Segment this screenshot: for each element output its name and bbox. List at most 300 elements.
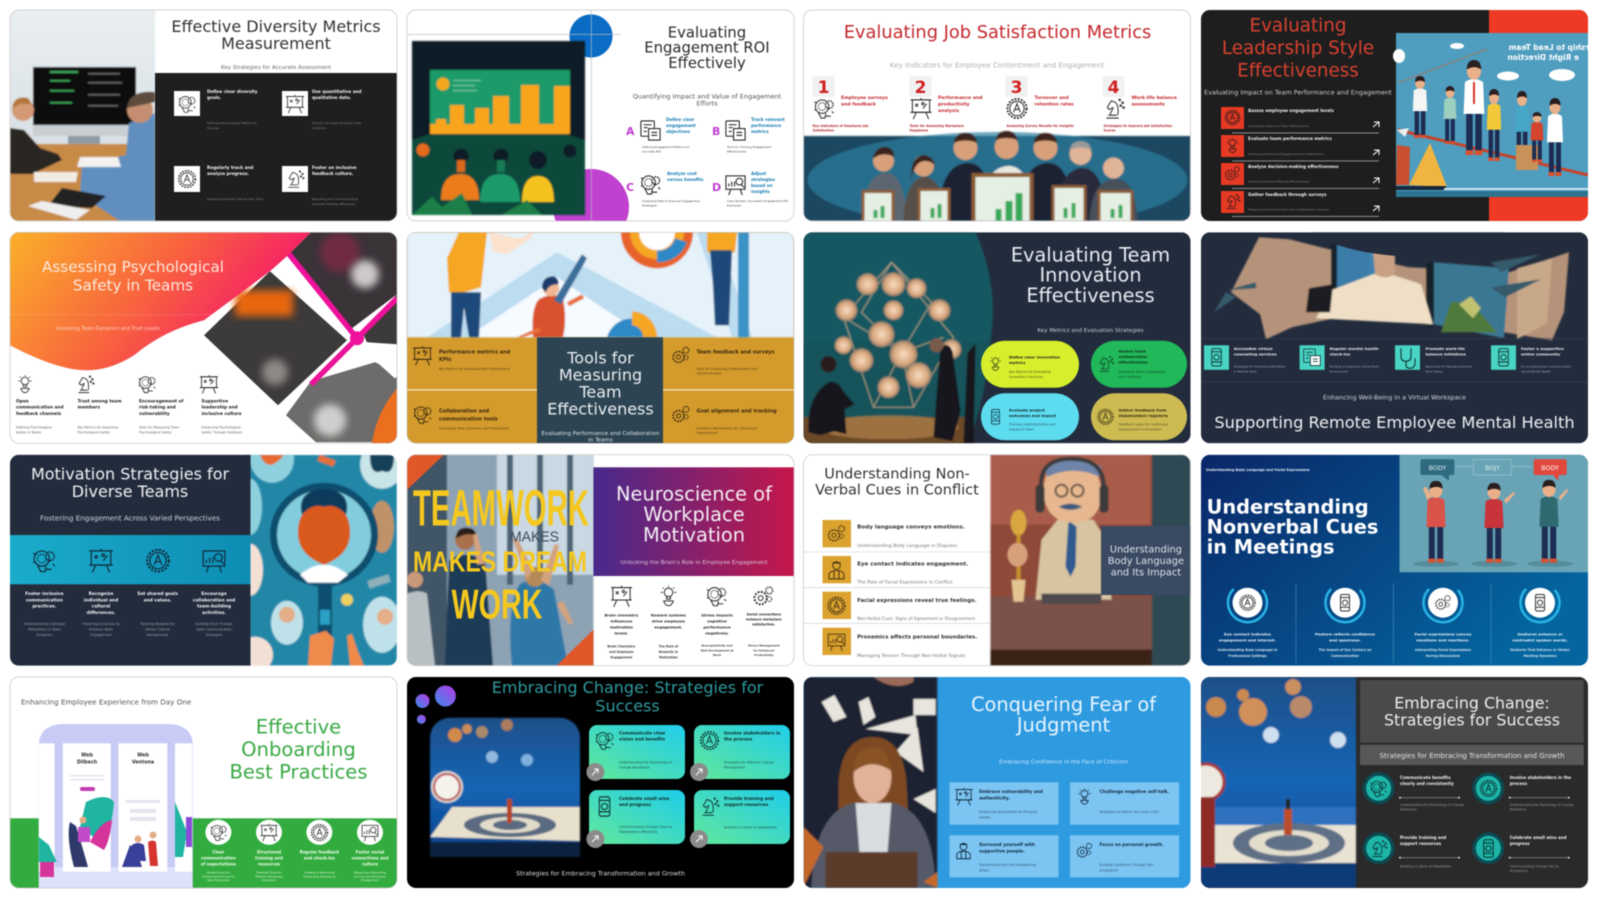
- item: collaboration: [414, 407, 509, 430]
- item B: Track relevant: [751, 117, 785, 122]
- item: leadership: Enhancing Psychological: [202, 425, 241, 429]
- title: Evaluating: [1250, 16, 1346, 36]
- item: goal alignment: Feedback Mechanisms for Continuous: [696, 426, 757, 430]
- column: eye contact: engagement and interest.: [1219, 638, 1277, 643]
- card: vulnerability: Growth: [979, 815, 991, 819]
- panel: Tools for Measuring Team Effectiveness: [407, 196, 794, 443]
- title: Effectiveness: [1026, 284, 1155, 307]
- column: social connections: for Enhanced: [753, 648, 774, 652]
- card: personal growth: [1070, 835, 1179, 877]
- column: gestures: Gestures That Enhance or Hinder: [1510, 648, 1570, 652]
- item: communicate: [1363, 772, 1464, 812]
- row: decision making: Analyzing Decision-Making Effectiveness: [1248, 180, 1310, 184]
- column: social connections: Success and Employee: [354, 874, 386, 878]
- column: shared goals: Varied Cultural: [145, 628, 170, 632]
- column: shared goals: Set shared goals: [137, 591, 178, 597]
- item: open communication: communication and: [16, 405, 64, 411]
- title: Leadership Style: [1222, 38, 1374, 59]
- column: training: Essential Tools for: [256, 870, 282, 874]
- title: Onboarding: [241, 738, 356, 761]
- column: eye contact: Understanding Body Language in: [1218, 648, 1278, 652]
- column: expectations: communication: [201, 856, 236, 860]
- column: facial expressions: Facial expressions convey: [1414, 632, 1472, 637]
- panel: Evaluating Leadership Style Effectiveness: [1201, 10, 1589, 221]
- card: stakeholder feedback: Gather feedback from: [1118, 407, 1167, 412]
- card: personal growth: Focus on personal growth.: [1100, 842, 1164, 848]
- card: team collaboration: Assessing Team Collaboration: [1118, 370, 1166, 374]
- caption: Strategies for Embracing Transformation and Growth: [516, 870, 685, 878]
- column: training: Structured: [257, 850, 281, 854]
- item: open communication: feedback channels: [16, 411, 62, 417]
- card: stakeholders: the process: [724, 736, 753, 742]
- item: open communication: Open: [16, 398, 29, 404]
- item: quantitative data: [282, 89, 362, 130]
- column: inclusive communication: [24, 591, 65, 637]
- column: social connections: culture: [362, 862, 378, 866]
- card: team collaboration: and Creativity: [1118, 375, 1141, 379]
- title: Evaluating Team: [1011, 243, 1170, 266]
- subtitle: Embracing Confidence in the Face of Criticism: [999, 760, 1128, 766]
- item: work-life balance: Promote work-life: [1426, 346, 1465, 351]
- illustration: clay professor with headphones: [990, 455, 1190, 666]
- column: eye contact: [1218, 575, 1278, 658]
- column: check-ins: and check-ins: [304, 856, 336, 860]
- column: social connections: Engagement: [361, 878, 380, 882]
- subtitle: Fostering Engagement Across Varied Perspectives: [40, 514, 220, 523]
- item 3: Analyzing Survey Results for Insights: [1006, 124, 1074, 128]
- icon band: [10, 535, 250, 584]
- column: check-ins: Regular feedback: [300, 850, 340, 854]
- row: proxemics: [822, 628, 977, 659]
- row: decision making: [1221, 163, 1379, 189]
- column: brain chemistry: Engagement: [610, 656, 633, 660]
- title block: Motivation: [643, 524, 745, 547]
- title: Motivation Strategies for: [31, 465, 229, 484]
- column: stress: negatively.: [705, 630, 729, 635]
- column: cultural differences: Engagement: [90, 633, 112, 637]
- title: Innovation: [1039, 264, 1142, 287]
- card: supportive people: [950, 835, 1058, 877]
- item 4: Scores: [1104, 129, 1116, 133]
- card: team collaboration: Assess team: [1118, 348, 1146, 353]
- title: Measurement: [221, 34, 331, 53]
- item: open communication: [16, 375, 64, 435]
- column: gestures: Meeting Dynamics: [1523, 654, 1557, 658]
- illustration: audience watching a chart: [412, 41, 585, 215]
- item: check-ins: Building a Supportive Virtual Work: [1330, 364, 1380, 368]
- column: inclusive communication: Dynamics: [36, 633, 53, 637]
- item: team feedback: Communication: [696, 372, 722, 376]
- item A: Defining Engagement Metrics for: [642, 145, 691, 149]
- panel: Embracing Change: Strategies for Success (grey): [1188, 677, 1588, 888]
- item: check-ins: [1300, 345, 1380, 373]
- title block: Effectiveness: [547, 399, 654, 418]
- illustration: team analysing a target: [407, 196, 794, 337]
- column: team building: Encourage: [201, 591, 227, 597]
- row: eye contact: [822, 556, 968, 586]
- item: trust: Psychological Safety: [78, 431, 110, 435]
- item B: [712, 117, 785, 154]
- item: performance metrics: KPIs: [439, 357, 451, 363]
- card: stakeholder feedback: Feedback Loops for Continuous: [1118, 422, 1169, 426]
- subtitle: Enhancing Employee Experience from Day One: [21, 698, 192, 706]
- item C: C: [626, 181, 634, 194]
- item: risk taking: risk-taking and: [139, 405, 176, 411]
- column: training: [255, 820, 283, 882]
- item: communicate: Understanding the Psychology of Change: [1400, 803, 1464, 807]
- card: supportive people: Action: [979, 868, 989, 872]
- title: Success: [595, 696, 660, 715]
- item 4: assessments: [1132, 102, 1165, 108]
- title block: [537, 337, 663, 443]
- row: body language: [822, 520, 965, 549]
- item C: Analyzing Data to Improve Engagement: [642, 199, 701, 203]
- item: trust: members: [78, 405, 100, 411]
- title: Nonverbal Cues: [1207, 516, 1378, 539]
- card: stakeholder feedback: Improvement in Innovation: [1118, 428, 1162, 432]
- card: vulnerability: authenticity.: [979, 795, 1010, 801]
- column: social connections: Measuring Onboarding: [354, 870, 386, 874]
- item D: [712, 171, 788, 208]
- column: posture: and openness.: [1329, 638, 1361, 643]
- item: training: [1363, 832, 1460, 868]
- item: define goals: Success: [207, 126, 220, 130]
- column: shared goals: and values.: [144, 597, 172, 603]
- item 1: 1: [818, 78, 829, 98]
- subtitle: Quantifying Impact and Value of Engagement: [633, 92, 782, 100]
- item A: Define clear: [666, 117, 695, 122]
- column: reward systems: The Role of: [659, 645, 679, 649]
- column: check-ins: Creating a Welcoming: [304, 870, 335, 874]
- card: small wins: and progress: [619, 802, 651, 808]
- item: risk taking: vulnerability: [139, 411, 170, 417]
- card: vision: Change Resistance: [619, 766, 649, 770]
- item: communicate: clearly and consistently: [1400, 781, 1454, 786]
- title: Effective Diversity Metrics: [171, 17, 381, 36]
- column: facial expressions: During Discussions: [1426, 654, 1460, 658]
- subtitle block: Strategies for Embracing Transformation and Growth: [1379, 752, 1565, 760]
- callout: body language: [1101, 526, 1190, 595]
- card: small wins: Communicating Change: Fixed to: [619, 825, 672, 829]
- item 1: Employee surveys: [841, 95, 888, 101]
- card: innovation metrics: Key Metrics for Evaluating: [1009, 370, 1051, 374]
- item: check-ins: check-ins: [1330, 352, 1351, 356]
- item 4: Strategies to Improve Job Satisfaction: [1104, 124, 1173, 128]
- card: personal growth: Building Confidence Through Self-: [1100, 863, 1154, 867]
- item: stakeholders: process: [1510, 781, 1528, 786]
- item: work-life balance: [1395, 345, 1473, 373]
- column: facial expressions: emotions and reactions.: [1416, 638, 1470, 643]
- photo: teamwork high five: MAKES: [510, 529, 559, 546]
- title: Evaluating: [668, 24, 746, 42]
- item: stakeholders: [1472, 772, 1574, 812]
- card: project outcomes: outcomes and impact: [1009, 413, 1056, 418]
- item D: insights: [751, 189, 770, 194]
- illustration: leaders on a ship: [1393, 33, 1589, 197]
- item: online community: Foster a supportive: [1521, 346, 1564, 351]
- subtitle: Evaluating Impact on Team Performance and Engagement: [1204, 88, 1392, 96]
- illustration: three people with BODY speech bubbles: BOJY: [1485, 464, 1500, 472]
- illustration: onboarding app screens: Dilbech: [77, 760, 98, 766]
- blurred photo hexagons: [204, 232, 397, 443]
- panel: Evaluating Team Innovation Effectiveness: [804, 232, 1190, 443]
- item C: [626, 171, 704, 208]
- title: Best Practices: [229, 760, 368, 784]
- item C: versus benefits: [667, 177, 704, 182]
- column: social connections: satisfaction.: [752, 623, 775, 627]
- item: goal alignment: [673, 406, 777, 435]
- column: stress: [701, 588, 734, 657]
- column: shared goals: [137, 591, 178, 637]
- item: collaboration: Collaboration and: [439, 408, 490, 414]
- item B: B: [712, 125, 720, 138]
- item 2: 2: [915, 78, 926, 98]
- item 4: Work-life balance: [1132, 95, 1177, 101]
- card: self-talk: [1070, 782, 1179, 825]
- column: brain chemistry: motivation: [610, 625, 633, 630]
- item: small wins: Celebrate small wins and: [1510, 835, 1567, 840]
- title block: Neuroscience of: [616, 483, 773, 506]
- column: inclusive communication: practices.: [32, 604, 57, 610]
- item 2: [910, 76, 982, 133]
- item: open communication: Safety in Teams: [16, 431, 42, 435]
- item 2: Tools for Assessing Workplace: [910, 124, 964, 128]
- item 2: Performance and: [938, 95, 982, 101]
- item: risk taking: Psychological Safety: [139, 431, 172, 435]
- item: track progress: Regularly track and: [207, 165, 253, 170]
- title block: [593, 467, 794, 576]
- item A: [626, 117, 696, 154]
- column: brain chemistry: influences: [610, 619, 633, 624]
- title block: Tools for: [566, 348, 634, 367]
- column: brain chemistry: [604, 586, 639, 660]
- item: performance metrics: [413, 346, 511, 371]
- column: brain chemistry: Brain chemistry: [604, 613, 639, 618]
- item: trust: Key Metrics for Assessing: [78, 425, 118, 429]
- item: check-ins: Regular mental health: [1330, 346, 1379, 351]
- illustration: leaders on a ship: rship to Lead Team: [1508, 43, 1589, 52]
- row: surveys: [1221, 191, 1379, 217]
- card: project outcomes: [981, 393, 1079, 440]
- title: Effectiveness: [1237, 61, 1359, 82]
- photo: target board with clock: [1188, 677, 1356, 888]
- item 1: and feedback: [841, 102, 877, 108]
- row: proxemics: Proxemics affects personal boundaries.: [857, 635, 977, 641]
- title: Understanding: [1207, 496, 1369, 519]
- row: engagement levels: Evaluating Impact on Team Performance: [1248, 124, 1309, 128]
- item: feedback culture: [282, 165, 358, 206]
- photo: meeting at computer: [10, 10, 155, 221]
- item 3: 3: [1011, 78, 1022, 98]
- item: define goals: [174, 89, 258, 130]
- panel: Evaluating Job Satisfaction Metrics: [804, 10, 1190, 228]
- row: proxemics: Managing Tension Through Non-Verbal Signals: [857, 653, 966, 659]
- card: personal growth: Acceptance: [1100, 868, 1118, 872]
- card: vision: vision and benefits: [619, 736, 666, 742]
- item: quantitative data: Use quantitative and: [312, 89, 362, 94]
- column: gestures: [1510, 575, 1570, 658]
- column: reward systems: [651, 586, 687, 660]
- item: trust: [78, 376, 122, 435]
- item: small wins: Communicating Change: Key to: [1510, 864, 1559, 868]
- panel: Motivation Strategies for Diverse Teams: [10, 435, 404, 673]
- card: small wins: Celebrate small wins: [619, 796, 670, 802]
- column: stress: performance: [703, 625, 731, 630]
- item A: objectives: [666, 129, 691, 134]
- item A: engagement: [666, 123, 696, 128]
- item: feedback culture: Foster an inclusive: [312, 165, 357, 170]
- column: brain chemistry: Brain Chemistry: [607, 645, 635, 649]
- item B: performance: [751, 123, 781, 128]
- column: training: resources: [258, 862, 281, 866]
- item: trust: Trust among team: [78, 398, 122, 404]
- item: work-life balance: balance initiatives: [1426, 352, 1467, 356]
- photo band with torn edges: [1214, 237, 1569, 340]
- column: social connections: connections and: [352, 856, 389, 860]
- row: eye contact: The Role of Facial Expressions in Conflict: [856, 580, 953, 586]
- photo: glowing lamp sculpture: [804, 232, 993, 443]
- column: social connections: Social connections: [746, 613, 781, 617]
- subtitle: Efforts: [696, 99, 718, 107]
- card: small wins: [586, 790, 685, 848]
- item: feedback culture: Diversity Findings Effectively: [312, 202, 356, 206]
- row: body language: Body language conveys emotions.: [857, 525, 965, 531]
- column: team building: collaboration and: [193, 597, 235, 603]
- item: goal alignment: Goal alignment and tracking: [696, 408, 777, 414]
- card: project outcomes: Evaluate project: [1009, 407, 1045, 412]
- column: gestures: Gestures enhance or: [1517, 632, 1563, 637]
- title block: Evaluating Performance and Collaboration: [541, 431, 660, 437]
- title: Embracing Change: Strategies for: [492, 678, 764, 697]
- item A: A: [626, 125, 635, 138]
- column: facial expressions: [1414, 575, 1472, 658]
- row: team metrics: Evaluate team performance metrics: [1248, 136, 1332, 141]
- item: collaboration: communication tools: [439, 416, 498, 422]
- panel: Conquering Fear of Judgment: [804, 677, 1190, 888]
- item: track progress: analyze progress.: [207, 171, 249, 176]
- item: online community: [1491, 345, 1572, 373]
- item: online community: Encouraging Open Communication: [1521, 364, 1572, 368]
- item: open communication: Defining Psychological: [16, 425, 52, 429]
- item C: Analyze cost: [667, 171, 697, 176]
- item 2: Happiness: [910, 129, 928, 133]
- column: reward systems: engagement.: [654, 625, 683, 630]
- column: expectations: Clear: [213, 850, 224, 854]
- column: eye contact: Eye contact indicates: [1224, 632, 1272, 637]
- column: team building: Strategies: [206, 633, 223, 637]
- item: feedback culture: feedback culture.: [312, 171, 354, 176]
- subtitle: Assessing Team Dynamics and Trust Levels: [56, 326, 160, 332]
- column: facial expressions: Interpreting Facial Expressions: [1415, 648, 1471, 652]
- item D: strategies: [751, 177, 775, 182]
- row: facial expressions: [822, 592, 976, 622]
- column: training: Integration: [261, 878, 277, 882]
- title: Supporting Remote Employee Mental Health: [1214, 413, 1575, 432]
- card: supportive people: Transforming Fear Into Empowering: [978, 863, 1036, 867]
- card: stakeholder feedback: stakeholders regularly: [1118, 413, 1169, 418]
- title: Effective: [256, 716, 341, 738]
- card: stakeholders: Management: [724, 766, 746, 770]
- item: team feedback: Team feedback and surveys: [696, 349, 775, 355]
- panel: Effective Diversity Metrics Measurement: [10, 10, 397, 221]
- card: vulnerability: Embracing Vulnerability for Personal: [979, 810, 1037, 814]
- item: quantitative data: Tools for Accurate Diversity Data: [311, 121, 361, 125]
- column: cultural differences: [82, 591, 120, 637]
- column: social connections: Foster social: [356, 850, 385, 854]
- title: Conquering Fear of: [971, 693, 1157, 716]
- row: facial expressions: Non-Verbal Cues: Signs of Agreement or Disagreement: [857, 616, 975, 622]
- card: project outcomes: Tracking Implementation and: [1008, 422, 1056, 426]
- decorative circles: [553, 14, 629, 245]
- column: posture: Communication: [1331, 654, 1360, 658]
- card: stakeholders: [690, 725, 790, 781]
- dark strategy panel: [155, 73, 397, 221]
- card: supportive people: Surround yourself with: [979, 842, 1035, 848]
- card: innovation metrics: Innovation Outcomes: [1009, 375, 1043, 379]
- card: training: support resources: [724, 802, 769, 808]
- item: leadership: leadership and: [202, 405, 238, 411]
- title: in Meetings: [1207, 536, 1335, 559]
- item: work-life balance: Resources for Managing Remote: [1426, 364, 1473, 368]
- item C: Strategies: [642, 204, 657, 208]
- column: posture: The Impact of Eye Contact on: [1319, 648, 1372, 652]
- column: brain chemistry: levels.: [614, 630, 629, 635]
- column: stress: Neuroplasticity and: [702, 644, 732, 648]
- gradient title shape: [10, 232, 311, 370]
- panel: Assessing Psychological Safety in Teams: [10, 232, 397, 443]
- column: cultural differences: Enhance Team: [89, 628, 113, 632]
- column: stress: Skill Development at: [701, 648, 734, 652]
- title: Assessing Psychological: [42, 258, 224, 276]
- column: expectations: New Employees: [207, 878, 230, 882]
- column: social connections: enhance workplace: [746, 618, 783, 622]
- title block: Workplace: [643, 503, 745, 526]
- column: stress: Work: [713, 653, 721, 657]
- column: gestures: contradict spoken words.: [1512, 638, 1568, 643]
- item D: based on: [751, 183, 772, 188]
- row: facial expressions: Facial expressions reveal true feelings.: [857, 598, 976, 604]
- item: virtual counseling: counseling services: [1234, 352, 1277, 356]
- column: inclusive communication: Understanding Individual: [24, 622, 65, 626]
- row: engagement levels: [1221, 107, 1379, 133]
- title: Safety in Teams: [73, 277, 193, 295]
- illustration: three people with BODY speech bubbles: BODY: [1429, 464, 1446, 472]
- panel: Understanding Non-Verbal Cues in Conflict: [804, 455, 1190, 666]
- item: virtual counseling: [1204, 345, 1285, 373]
- item D: Adjust: [751, 171, 766, 176]
- title block: [1360, 680, 1584, 743]
- item: small wins: Acceptance: [1510, 869, 1528, 873]
- title block: Team: [578, 382, 622, 401]
- card: team collaboration: effectiveness: [1118, 360, 1148, 365]
- item: define goals: Define clear diversity: [207, 89, 258, 94]
- item D: Examples: [727, 204, 742, 208]
- title block: Unlocking the Brain's Role in Employee Engagement: [620, 560, 768, 566]
- subtitle: Enhancing Well-Being in a Virtual Workspace: [1323, 393, 1466, 401]
- column: reward systems: drive employee: [652, 619, 685, 624]
- title block: Strategies for Success: [1384, 710, 1560, 730]
- column: inclusive communication: Foster inclusive: [25, 591, 64, 597]
- item: leadership: [200, 375, 242, 435]
- illustration: onboarding app screens: Web: [137, 752, 149, 758]
- item: performance metrics: Performance metrics and: [439, 349, 511, 355]
- card: innovation metrics: metrics: [1009, 360, 1026, 365]
- photo: teamwork high five: TEAMWORK: [413, 480, 589, 537]
- column: team building: Building Trust Through: [195, 622, 233, 626]
- photo: teamwork high five: WORK: [452, 581, 542, 628]
- item: online community: online community: [1521, 352, 1561, 356]
- illustration: three people with BODY speech bubbles: BODY: [1541, 464, 1559, 472]
